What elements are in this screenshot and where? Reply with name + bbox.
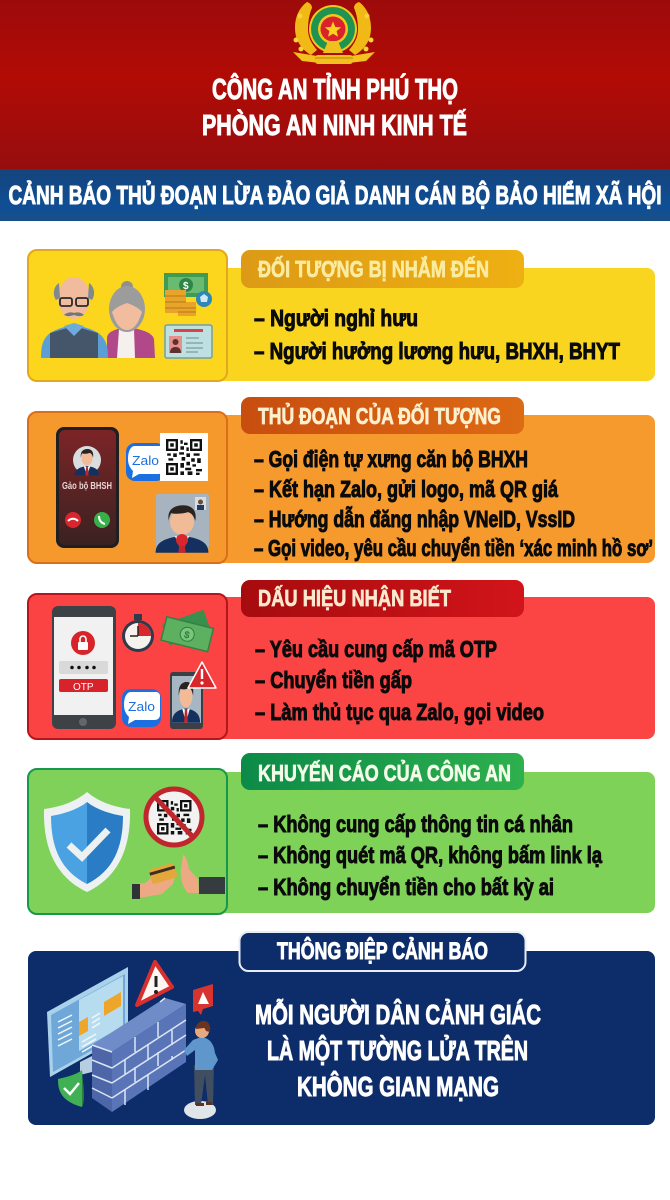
image box xyxy=(28,769,227,914)
text block: – Làm thủ tục qua Zalo, gọi video xyxy=(255,699,544,725)
panel body xyxy=(200,772,655,913)
text block: – Người nghỉ hưu xyxy=(254,305,418,331)
icon: video call warning xyxy=(170,662,216,729)
heading tag: THỦ ĐOẠN CỦA ĐỐI TƯỢNG xyxy=(258,401,501,429)
text block xyxy=(255,636,544,725)
panel: warning message xyxy=(28,932,655,1125)
text block: – Yêu cầu cung cấp mã OTP xyxy=(255,636,497,662)
icon: firewall xyxy=(92,998,186,1112)
header: red band xyxy=(0,0,670,169)
icon: cash xyxy=(161,610,213,652)
panel: target group xyxy=(28,250,655,381)
title xyxy=(202,72,467,142)
icon: police emblem xyxy=(293,2,375,64)
banner xyxy=(0,169,670,221)
heading tag xyxy=(241,753,524,790)
icon: money and coins xyxy=(164,273,212,316)
text block xyxy=(254,305,621,364)
heading tag xyxy=(241,397,524,434)
image box xyxy=(28,412,227,563)
text block: – Kết hạn Zalo, gửi logo, mã QR giá xyxy=(254,476,559,502)
icon: Zalo xyxy=(122,689,161,727)
panel body xyxy=(28,951,655,1125)
image box xyxy=(28,250,227,381)
icon: money and coins: $ xyxy=(183,281,189,292)
message: LÀ MỘT TƯỜNG LỬA TRÊN xyxy=(267,1034,528,1066)
panel body xyxy=(200,415,655,563)
message: KHÔNG GIAN MẠNG xyxy=(297,1070,499,1102)
text block xyxy=(254,446,653,561)
icon: person xyxy=(184,1021,218,1119)
message xyxy=(255,998,541,1102)
icon: alert bubble xyxy=(193,984,213,1015)
heading tag xyxy=(241,580,524,617)
title: PHÒNG AN NINH KINH TẾ xyxy=(202,108,467,142)
panel body xyxy=(200,268,655,381)
message: MỖI NGƯỜI DÂN CẢNH GIÁC xyxy=(255,998,541,1030)
text block: – Không cung cấp thông tin cá nhân xyxy=(258,811,573,837)
panel: warning signs xyxy=(28,580,655,739)
panel: scam tactics xyxy=(28,397,655,563)
icon: phone call: Gảo bộ BHSH xyxy=(62,481,112,492)
icon: ID card xyxy=(165,325,212,358)
title: CÔNG AN TỈNH PHÚ THỌ xyxy=(212,72,458,106)
text block: – Gọi điện tự xưng căn bộ BHXH xyxy=(254,446,528,472)
heading tag: ĐỐI TƯỢNG BỊ NHẮM ĐẾN xyxy=(258,255,489,282)
icon: green shield xyxy=(58,1070,84,1107)
icon: Zalo xyxy=(126,443,165,481)
icon: stopwatch xyxy=(122,614,154,652)
icon: video call xyxy=(156,494,209,553)
image box xyxy=(28,594,227,739)
icon: OTP phone xyxy=(52,606,116,729)
icon: QR code xyxy=(160,433,208,481)
icon: no QR xyxy=(146,789,202,845)
icon: monitor xyxy=(47,967,128,1077)
panel: police advice xyxy=(28,753,655,914)
panel body xyxy=(200,597,655,739)
text block: – Hướng dẫn đăng nhập VNeID, VssID xyxy=(254,505,575,532)
icon: elderly couple xyxy=(41,277,155,358)
heading tag: THÔNG ĐIỆP CẢNH BÁO xyxy=(277,936,488,965)
icon: warning triangle xyxy=(137,962,172,1005)
icon: cash: $ xyxy=(183,630,191,642)
icon: OTP phone: OTP xyxy=(73,682,94,693)
heading tag: KHUYẾN CÁO CỦA CÔNG AN xyxy=(258,758,511,786)
text block: – Chuyển tiền gấp xyxy=(255,667,412,693)
heading tag: DẤU HIỆU NHẬN BIẾT xyxy=(258,584,451,611)
icon: shield xyxy=(44,792,130,892)
heading tag xyxy=(240,932,526,971)
icon: refusing card xyxy=(132,855,225,899)
text block: – Không chuyển tiền cho bất kỳ ai xyxy=(258,874,554,900)
icon: phone call xyxy=(56,427,119,548)
heading tag xyxy=(241,250,524,288)
text block xyxy=(258,811,603,900)
